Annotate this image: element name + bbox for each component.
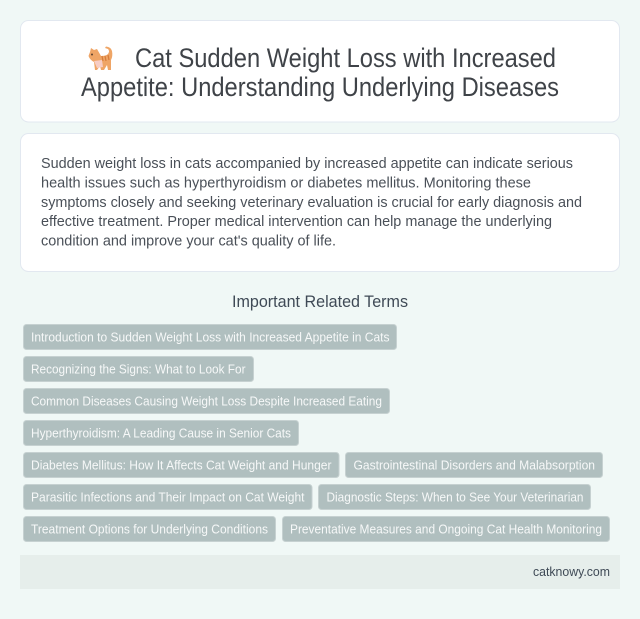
tag: diabetes mellitus: Diabetes Mellitus: How It Affects Cat Weight and Hunger	[31, 458, 332, 472]
tag: introduction	[24, 324, 396, 350]
tag: gastrointestinal disorders: Gastrointestinal Disorders and Malabsorption	[354, 458, 595, 472]
heading: important related terms: Important Related Terms	[232, 292, 408, 311]
tag: diagnostic steps: Diagnostic Steps: When to See Your Veterinarian	[326, 490, 584, 504]
tag: parasitic infections: Parasitic Infections and Their Impact on Cat Weight	[31, 490, 305, 504]
title text: Appetite: Understanding Underlying Diseases	[81, 72, 559, 102]
tag: common diseases	[24, 388, 390, 414]
tag: recognizing the signs	[24, 356, 254, 382]
tag: preventative measures: Preventative Measures and Ongoing Cat Health Monitoring	[290, 522, 602, 536]
tag: gastrointestinal disorders	[346, 452, 602, 478]
tag: hyperthyroidism	[24, 420, 298, 446]
summary paragraph: health issues such as hyperthyroidism or diabetes mellitus. Monitoring these	[41, 174, 531, 192]
tag: diabetes mellitus	[24, 452, 339, 478]
tag: recognizing the signs: Recognizing the Signs: What to Look For	[31, 362, 246, 376]
tag: treatment options: Treatment Options for Underlying Conditions	[31, 522, 268, 536]
summary paragraph: Sudden weight loss in cats accompanied by increased appetite can indicate serious	[41, 155, 573, 172]
tag list	[24, 324, 610, 542]
summary paragraph: effective treatment. Proper medical intervention can help manage the underlying	[41, 213, 552, 230]
tag: preventative measures	[282, 516, 610, 542]
title text	[81, 43, 559, 102]
title text: Cat Sudden Weight Loss with Increased	[135, 43, 556, 73]
tag: diagnostic steps	[318, 484, 590, 510]
summary paragraph	[41, 155, 582, 250]
footer	[20, 555, 620, 589]
icon: cat	[88, 46, 112, 70]
tag: hyperthyroidism: Hyperthyroidism: A Leading Cause in Senior Cats	[31, 426, 291, 440]
tag: common diseases: Common Diseases Causing Weight Loss Despite Increased Eating	[31, 394, 382, 408]
summary paragraph: condition and improve your cat's quality of life.	[41, 232, 336, 250]
footer source text: catknowy.com	[533, 564, 610, 579]
summary paragraph: symptoms closely and seeking veterinary evaluation is crucial for early diagnosis and	[41, 194, 582, 211]
tag: introduction: Introduction to Sudden Weight Loss with Increased Appetite in Cats	[31, 330, 390, 344]
panel: summary card	[20, 134, 620, 272]
panel: title card	[20, 20, 620, 122]
tag: parasitic infections	[24, 484, 312, 510]
tag: treatment options	[24, 516, 276, 542]
